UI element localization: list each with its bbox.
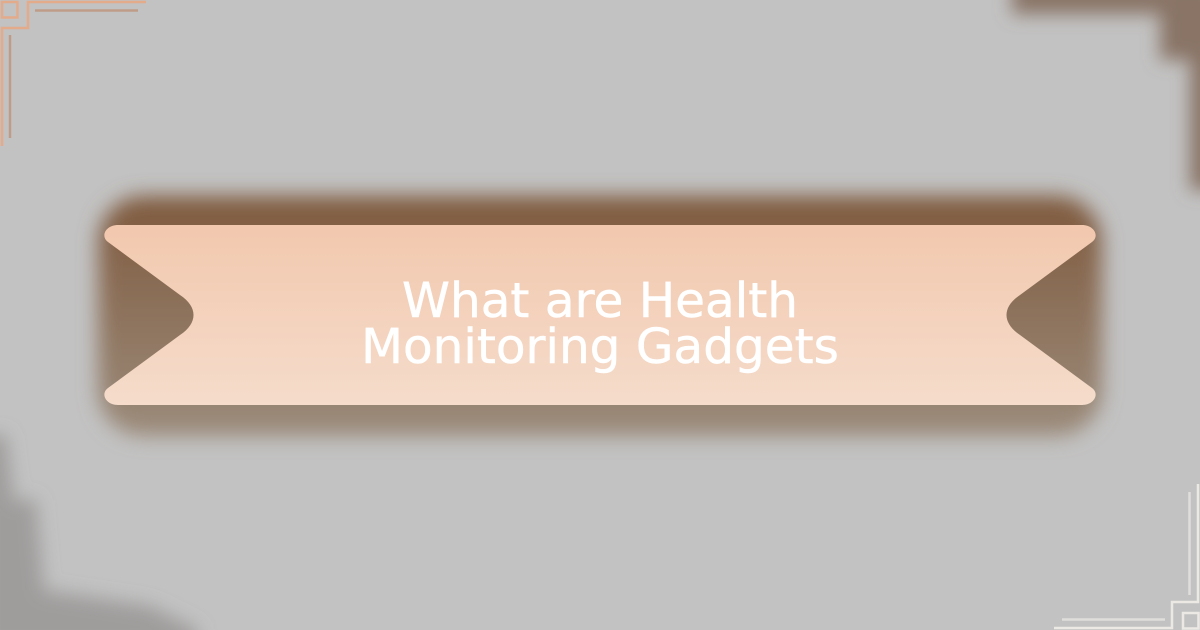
blurred shadow: bottom-left corner [0, 435, 198, 630]
ornament: top-left corner frame [2, 2, 146, 146]
title: What are Health [402, 273, 798, 329]
ornament: bottom-right corner frame [1054, 484, 1198, 628]
ribbon banner [104, 225, 1096, 405]
ribbon shadow [98, 196, 1102, 436]
blurred shadow: top-right corner [1012, 0, 1200, 190]
title: Monitoring Gadgets [361, 319, 839, 375]
